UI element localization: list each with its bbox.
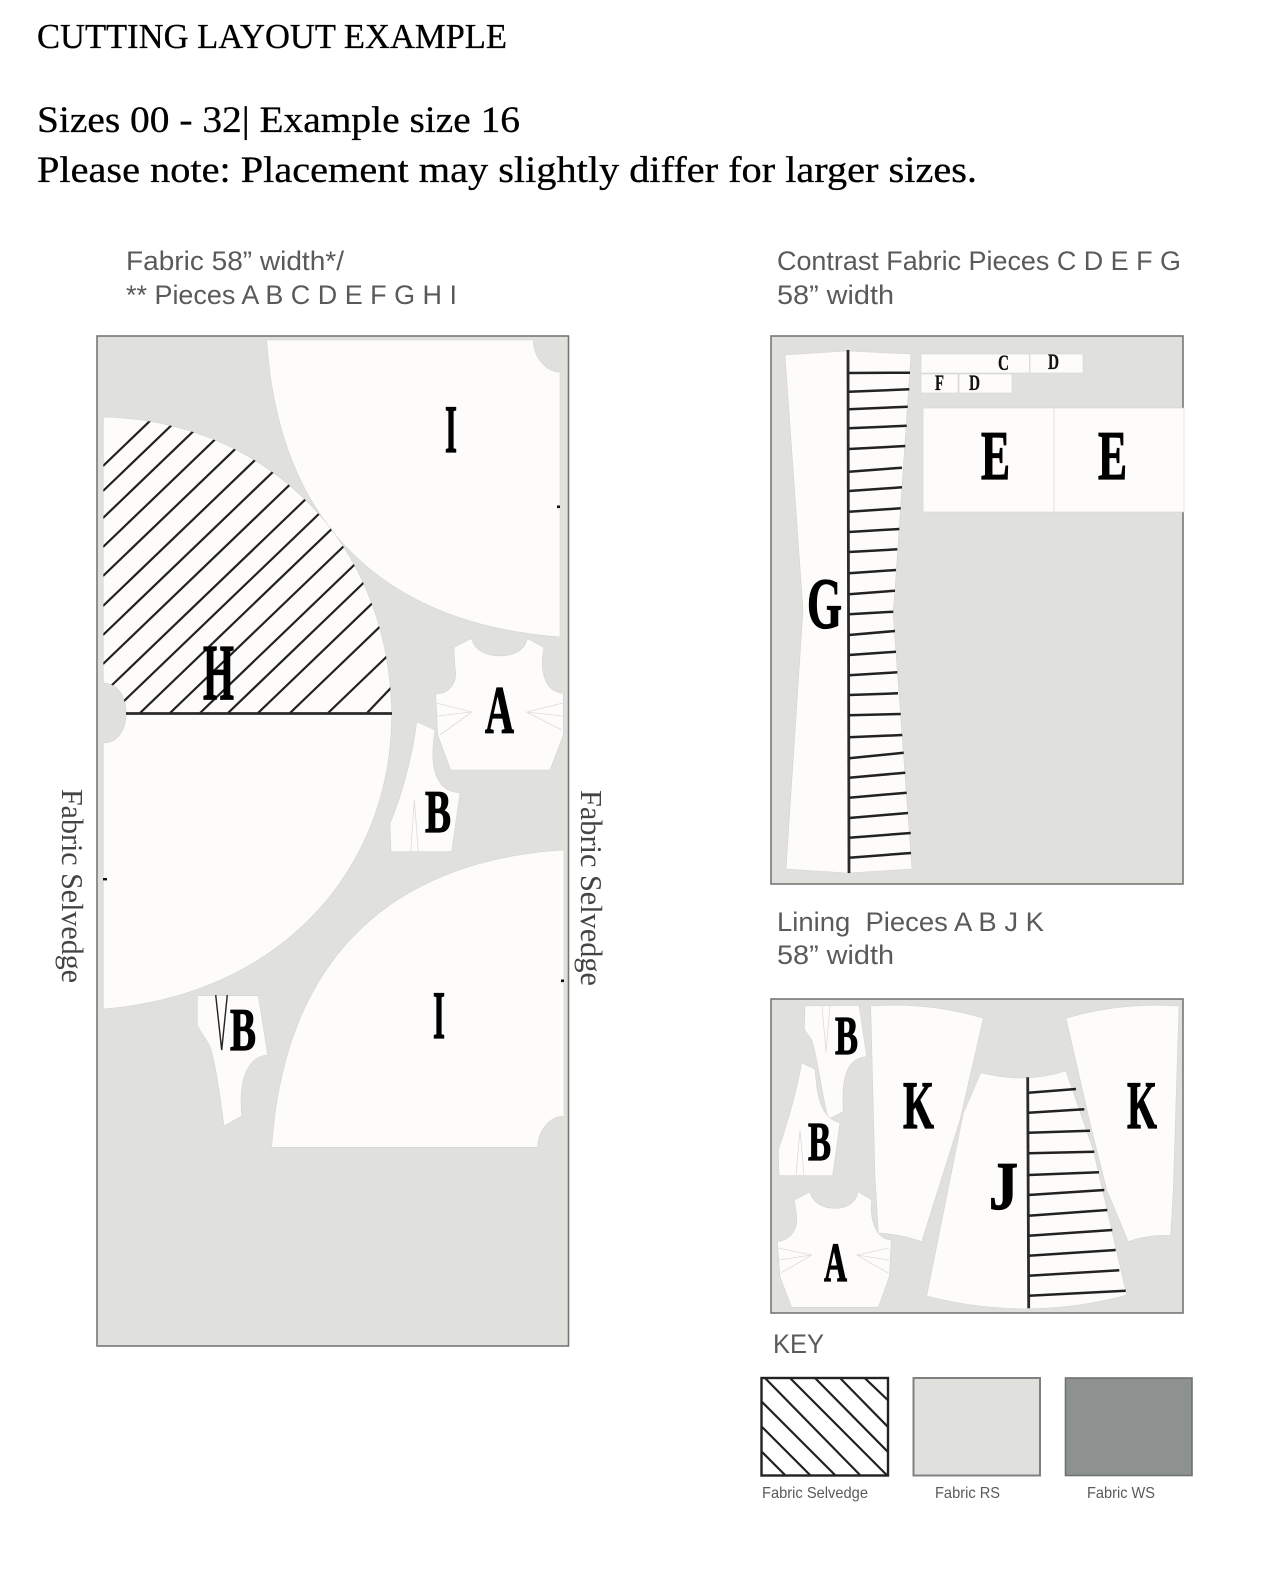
piece: G: G — [807, 564, 842, 644]
heading: lining: Lining Pieces A B J K — [777, 907, 1044, 937]
piece: D lower — [959, 370, 1012, 395]
label: right selvedge: Fabric Selvedge — [574, 790, 609, 986]
subtitle: sizes: Sizes 00 - 32| Example size 16 — [37, 100, 520, 141]
heading: lining: 58” width — [777, 940, 894, 970]
piece: E right: E — [1098, 418, 1127, 495]
piece: J: J — [989, 1148, 1018, 1224]
heading: main fabric: Fabric 58” width*/ — [126, 246, 345, 276]
heading: contrast fabric: 58” width — [777, 280, 894, 310]
heading: main fabric — [126, 246, 457, 310]
piece: I lower: I — [433, 977, 445, 1053]
piece: B lower — [778, 1063, 840, 1176]
key: fabric WS swatch: Fabric WS — [1087, 1485, 1155, 1502]
panel: contrast fabric layout — [771, 336, 1184, 884]
heading: main fabric: ** Pieces A B C D E F G H I — [126, 280, 457, 310]
title: CUTTING LAYOUT EXAMPLE — [37, 17, 507, 56]
piece: D top — [1030, 349, 1083, 374]
panel: lining layout — [771, 999, 1183, 1313]
heading: key: KEY — [773, 1329, 824, 1359]
piece: I top — [267, 340, 560, 637]
piece: J — [927, 1071, 1127, 1309]
piece: H with hatching: H — [203, 630, 234, 717]
piece: D top: D — [1048, 349, 1059, 374]
piece: A — [436, 638, 563, 770]
piece: B lower: B — [808, 1111, 831, 1172]
piece: B top — [804, 1005, 867, 1119]
piece: A: A — [824, 1232, 847, 1293]
piece: E right — [1054, 408, 1184, 512]
heading: lining — [777, 907, 1044, 970]
label: left selvedge: Fabric Selvedge — [55, 789, 90, 983]
key: fabric selvedge swatch: Fabric Selvedge — [762, 1485, 868, 1502]
piece: B lower — [197, 995, 268, 1126]
piece: E left: E — [981, 418, 1010, 495]
piece: F: F — [935, 370, 944, 395]
note: placement: Please note: Placement may slightly differ for larger sizes. — [37, 150, 977, 191]
piece: F — [921, 370, 958, 395]
piece: H with hatching — [103, 417, 392, 1009]
panel: main fabric layout — [96, 335, 570, 1347]
piece: I lower — [272, 850, 564, 1147]
piece: I top: I — [445, 391, 457, 467]
piece: K left — [871, 1005, 983, 1242]
key: fabric RS swatch — [914, 1378, 1040, 1502]
piece: A: A — [485, 672, 514, 748]
heading: contrast fabric — [777, 246, 1181, 310]
piece: K right: K — [1127, 1067, 1157, 1143]
heading: contrast fabric: Contrast Fabric Pieces C D E F G — [777, 246, 1181, 276]
piece: B upper — [390, 722, 460, 852]
piece: B lower: B — [230, 997, 256, 1063]
piece: A — [777, 1192, 891, 1307]
piece: E left — [923, 408, 1054, 512]
key: fabric selvedge swatch — [762, 1378, 888, 1502]
piece: D lower: D — [969, 370, 980, 395]
piece: C: C — [998, 350, 1009, 375]
piece: K left: K — [903, 1067, 934, 1143]
key: fabric RS swatch: Fabric RS — [935, 1485, 1000, 1502]
piece: K right — [1066, 1005, 1179, 1242]
piece: C — [921, 350, 1030, 375]
piece: G — [785, 350, 912, 873]
piece: B top: B — [835, 1005, 858, 1066]
piece: B upper: B — [425, 779, 451, 845]
key: fabric WS swatch — [1066, 1378, 1192, 1502]
